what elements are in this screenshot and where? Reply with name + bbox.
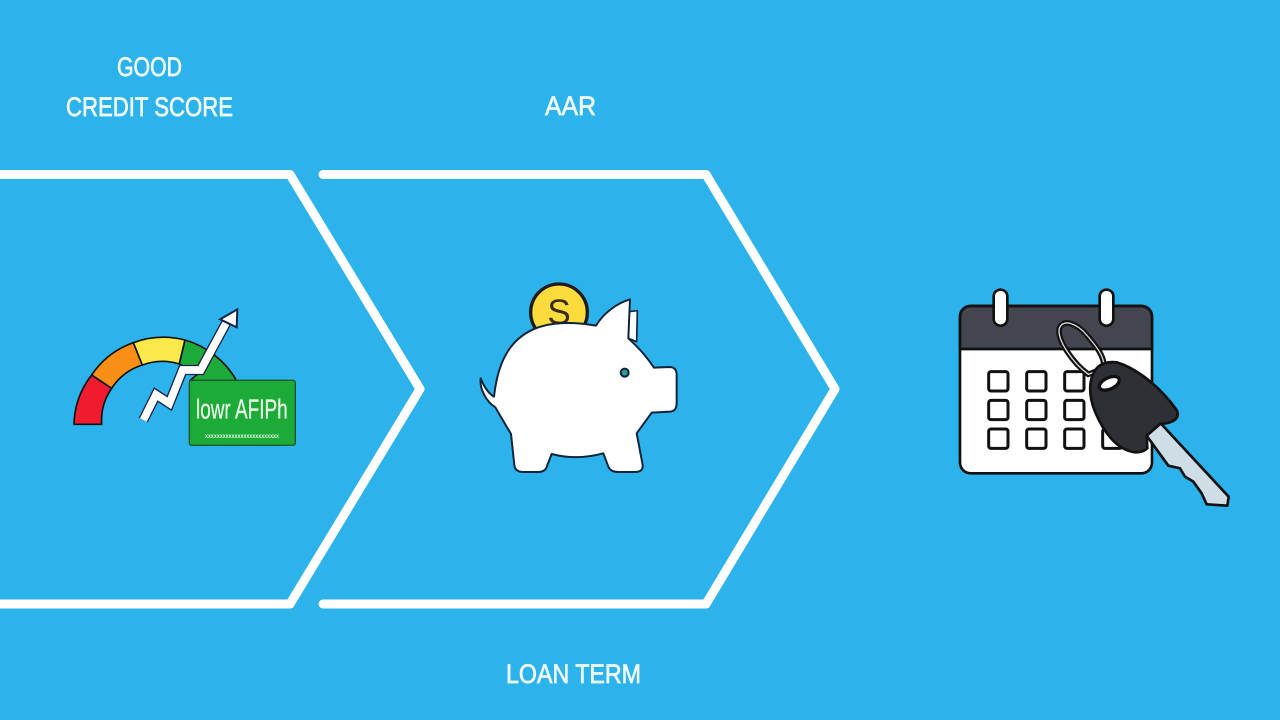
heading: good credit score: CREDIT SCORE	[66, 92, 233, 122]
calendar rings	[994, 290, 1113, 326]
pig eye	[621, 369, 629, 377]
gauge: green segment	[179, 340, 237, 381]
calendar body	[960, 306, 1152, 473]
pig body	[480, 299, 677, 472]
icon: credit score gauge with arrow and card	[74, 309, 295, 445]
key blade	[1147, 423, 1229, 506]
chevron: first panel outline	[0, 174, 420, 604]
coin	[531, 284, 587, 341]
calendar date grid	[989, 372, 1122, 448]
key ring	[1059, 323, 1104, 374]
heading: APR: AAR	[545, 91, 596, 121]
card fine print: xxxxxxxxxxxxxxxxxxxxxxxxx	[205, 433, 279, 440]
card text: lowr AFIPh	[196, 393, 288, 424]
heading: good credit score	[66, 52, 233, 122]
key fob	[1090, 362, 1178, 452]
gauge: yellow segment	[133, 337, 185, 365]
heading: loan term: LOAN TERM	[506, 659, 641, 689]
gauge: orange segment	[92, 343, 142, 388]
ear back	[628, 311, 637, 342]
key fob hole	[1097, 374, 1121, 393]
heading: good credit score: GOOD	[117, 52, 182, 82]
arrow: rising trend	[143, 309, 237, 420]
coin: S	[547, 293, 571, 332]
calendar header	[960, 306, 1152, 349]
icon: piggy bank with coin	[480, 284, 677, 472]
gauge: red segment	[74, 375, 112, 424]
card: loan APR	[189, 380, 295, 445]
chevron: second panel outline	[323, 174, 835, 604]
icon: calendar with car key	[960, 290, 1229, 506]
